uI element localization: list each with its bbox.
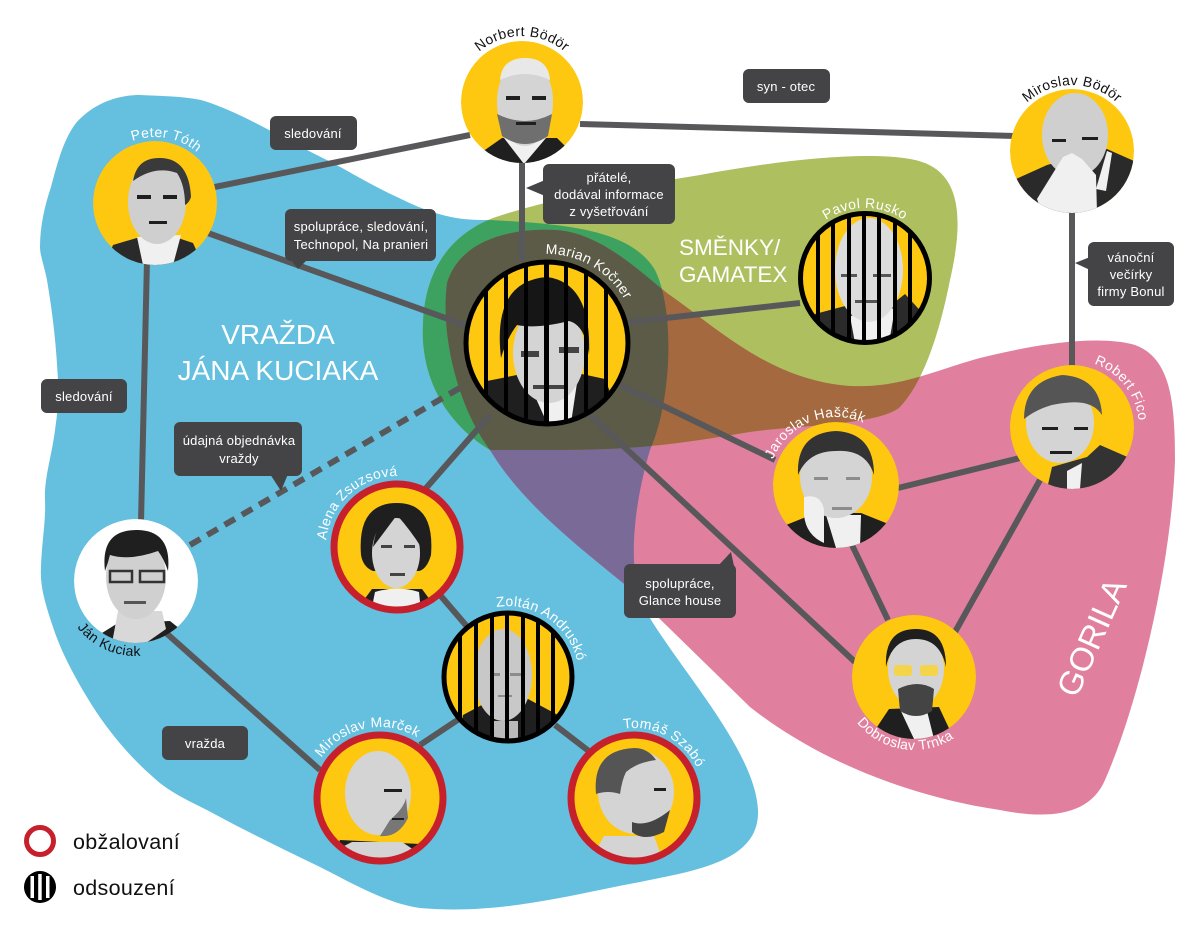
connection lines (141, 124, 1072, 770)
callout: údajná objednávka vraždy: vraždy (219, 451, 259, 466)
person: Marian Kočner (convicted) (464, 244, 631, 426)
prison bars (816, 213, 912, 343)
legend: accused (26, 828, 180, 854)
heading: Vražda Jána Kuciaka: VRAŽDA (221, 319, 335, 350)
callout: syn - otec: syn - otec (757, 79, 815, 94)
legend: accused: obžalovaní (73, 830, 180, 854)
callout: údajná objednávka vraždy (174, 422, 302, 491)
callout: spolupráce, Technopol (285, 209, 436, 269)
person: Dobroslav Trnka (852, 615, 976, 750)
panel: Směnky/Gamatex group (423, 156, 958, 450)
overlap: murder and Gamatex (422, 220, 662, 450)
callout: vražda: vražda (185, 736, 226, 751)
legend: convicted (24, 871, 175, 903)
person: Robert Fico (1010, 355, 1146, 489)
heading: Gorila: GORILA (1049, 573, 1134, 702)
person: Jaroslav Haščák (765, 406, 899, 548)
overlap: murder and Gorila (490, 446, 652, 584)
callout: přátelé: z vyšetřování (569, 204, 649, 219)
callout: vánoční večírky firmy Bonul: firmy Bonul (1097, 284, 1165, 299)
person: Norbert Bödör (461, 27, 583, 163)
callout: syn - otec (743, 69, 830, 103)
callout: spolupráce, Technopol: spolupráce, sledování, (294, 219, 428, 234)
person: Pavol Rusko (convicted): Pavol Rusko (822, 198, 906, 220)
person: Zoltán Andruskó (convicted) (442, 596, 587, 744)
overlap: Gamatex and Gorila (446, 230, 920, 450)
callout: sledování (left): sledování (55, 389, 113, 404)
overlap: all three groups (446, 230, 668, 450)
prison bars (484, 263, 608, 423)
callout: vánoční večírky firmy Bonul (1075, 242, 1174, 306)
person: Robert Fico: Robert Fico (1095, 355, 1146, 420)
person: Zoltán Andruskó (convicted): Zoltán Andruskó (496, 596, 587, 660)
callout: sledování (top) (270, 116, 357, 150)
heading: Směnky/Gamatex: GAMATEX (679, 262, 787, 287)
callout: spolupráce, Glance house: spolupráce, (645, 576, 715, 591)
callout: vánoční večírky firmy Bonul: vánoční (1108, 250, 1155, 265)
heading: Směnky/Gamatex: SMĚNKY/ (679, 235, 781, 260)
person: Marian Kočner (convicted): Marian Kočner (546, 244, 631, 298)
callout: přátelé: dodával informace (554, 187, 664, 202)
callout: sledování (top): sledování (284, 126, 342, 141)
callout: vražda (162, 726, 248, 760)
legend: convicted: odsouzení (73, 876, 175, 900)
person: Peter Tóth: Peter Tóth (130, 128, 200, 152)
person: Miroslav Marček (accused): Miroslav Marček (314, 717, 420, 757)
callout: spolupráce, Technopol: Technopol, Na pranieri (294, 237, 428, 252)
callout: přátelé (526, 164, 675, 224)
person: Norbert Bödör: Norbert Bödör (474, 27, 569, 51)
callout: spolupráce, Glance house: Glance house (639, 593, 721, 608)
callout: vánoční večírky firmy Bonul: večírky (1110, 267, 1153, 282)
callout: přátelé: přátelé, (587, 170, 631, 185)
person: Miroslav Bödör: Miroslav Bödör (1022, 76, 1122, 102)
heading: Vražda Jána Kuciaka: JÁNA KUCIAKA (178, 355, 379, 386)
person: Ján Kuciak (74, 519, 198, 656)
callout: spolupráce, Glance house (624, 552, 736, 618)
person: Peter Tóth (93, 128, 217, 265)
person: Dobroslav Trnka: Dobroslav Trnka (858, 716, 954, 750)
person: Jaroslav Haščák: Jaroslav Haščák (765, 406, 866, 458)
person: Pavol Rusko (convicted) (798, 198, 932, 345)
callout: sledování (left) (41, 379, 127, 413)
person: Tomáš Szabó (accused): Tomáš Szabó (622, 718, 706, 766)
person: Miroslav Bödör (1010, 76, 1134, 213)
prison bars (458, 612, 555, 742)
callout: údajná objednávka vraždy: údajná objednávka (183, 433, 296, 448)
person: Tomáš Szabó (accused) (568, 718, 706, 864)
panel: Vražda Jána Kuciaka group (40, 95, 758, 909)
person: Miroslav Marček (accused) (314, 717, 446, 864)
person: Alena Zsuzsová (accused): Alena Zsuzsová (317, 466, 398, 540)
person: Alena Zsuzsová (accused) (317, 466, 464, 614)
panel: Gorila group (446, 230, 1175, 815)
person: Ján Kuciak: Ján Kuciak (78, 623, 140, 656)
